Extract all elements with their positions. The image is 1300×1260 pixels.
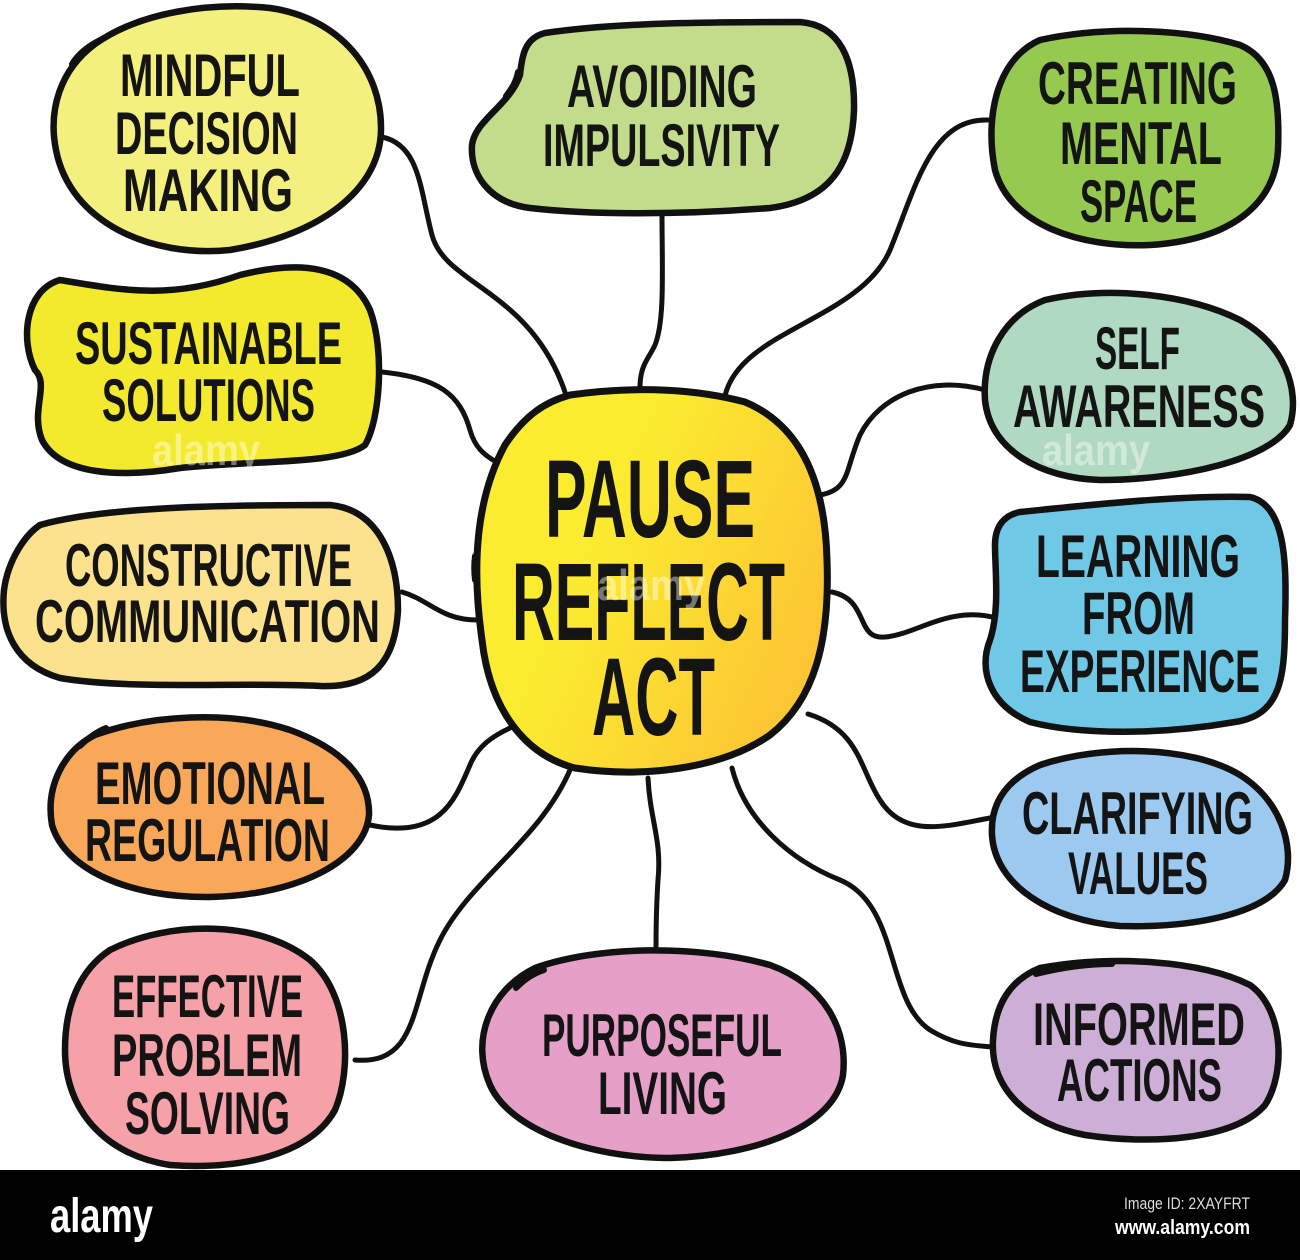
node: Creating Mental Space xyxy=(991,31,1278,245)
watermark: alamy xyxy=(1042,426,1150,475)
node: Constructive Communication: CONSTRUCTIVE xyxy=(65,532,352,599)
node: Clarifying Values xyxy=(992,751,1288,926)
node: Self Awareness xyxy=(985,293,1293,480)
node: Emotional Regulation: REGULATION xyxy=(85,807,330,874)
node: Self Awareness: SELF xyxy=(1095,315,1180,382)
node: Mindful Decision Making: MAKING xyxy=(123,157,293,224)
node: Purposeful Living: LIVING xyxy=(598,1060,727,1127)
node: Effective Problem Solving: EFFECTIVE xyxy=(112,963,303,1030)
footer logo: alamy xyxy=(50,1190,153,1243)
node: Mindful Decision Making xyxy=(54,6,381,251)
node: Mindful Decision Making: DECISION xyxy=(115,100,298,167)
node: Creating Mental Space: SPACE xyxy=(1080,168,1197,235)
footer image id: Image ID: 2XAYFRT xyxy=(1124,1194,1250,1213)
connector lines xyxy=(355,120,996,1060)
node: Emotional Regulation: EMOTIONAL xyxy=(95,750,325,817)
footer bar xyxy=(0,1170,1300,1260)
node: Avoiding Impulsivity xyxy=(472,22,854,213)
node: Effective Problem Solving: PROBLEM xyxy=(112,1022,302,1089)
node: Constructive Communication: COMMUNICATION xyxy=(35,588,380,655)
node: Effective Problem Solving: SOLVING xyxy=(125,1080,290,1147)
central node: Pause Reflect Act: ACT xyxy=(592,636,715,759)
node: Avoiding Impulsivity: IMPULSIVITY xyxy=(543,112,780,179)
node: Mindful Decision Making: MINDFUL xyxy=(120,42,300,109)
node: Effective Problem Solving xyxy=(65,929,345,1166)
node: Creating Mental Space: MENTAL xyxy=(1060,110,1222,177)
central node: Pause Reflect Act: REFLECT xyxy=(512,541,785,664)
node: Purposeful Living: PURPOSEFUL xyxy=(542,1002,782,1069)
watermark: alamy xyxy=(152,426,260,475)
watermark: alamy xyxy=(597,561,705,610)
node: Informed Actions xyxy=(993,961,1279,1140)
node: Learning From Experience xyxy=(986,497,1286,732)
node: Purposeful Living xyxy=(482,950,844,1158)
node: Clarifying Values: VALUES xyxy=(1068,840,1208,907)
node: Learning From Experience: FROM xyxy=(1082,580,1195,647)
node: Emotional Regulation xyxy=(51,717,369,897)
node: Sustainable Solutions xyxy=(27,267,379,475)
node: Constructive Communication xyxy=(3,505,398,686)
footer website: www.alamy.com xyxy=(1114,1217,1250,1239)
central node: Pause Reflect Act: PAUSE xyxy=(545,438,755,561)
node: Sustainable Solutions: SOLUTIONS xyxy=(102,367,315,434)
node: Sustainable Solutions: SUSTAINABLE xyxy=(75,310,342,377)
node: Avoiding Impulsivity: AVOIDING xyxy=(567,53,757,120)
central node: Pause Reflect Act xyxy=(474,390,827,772)
